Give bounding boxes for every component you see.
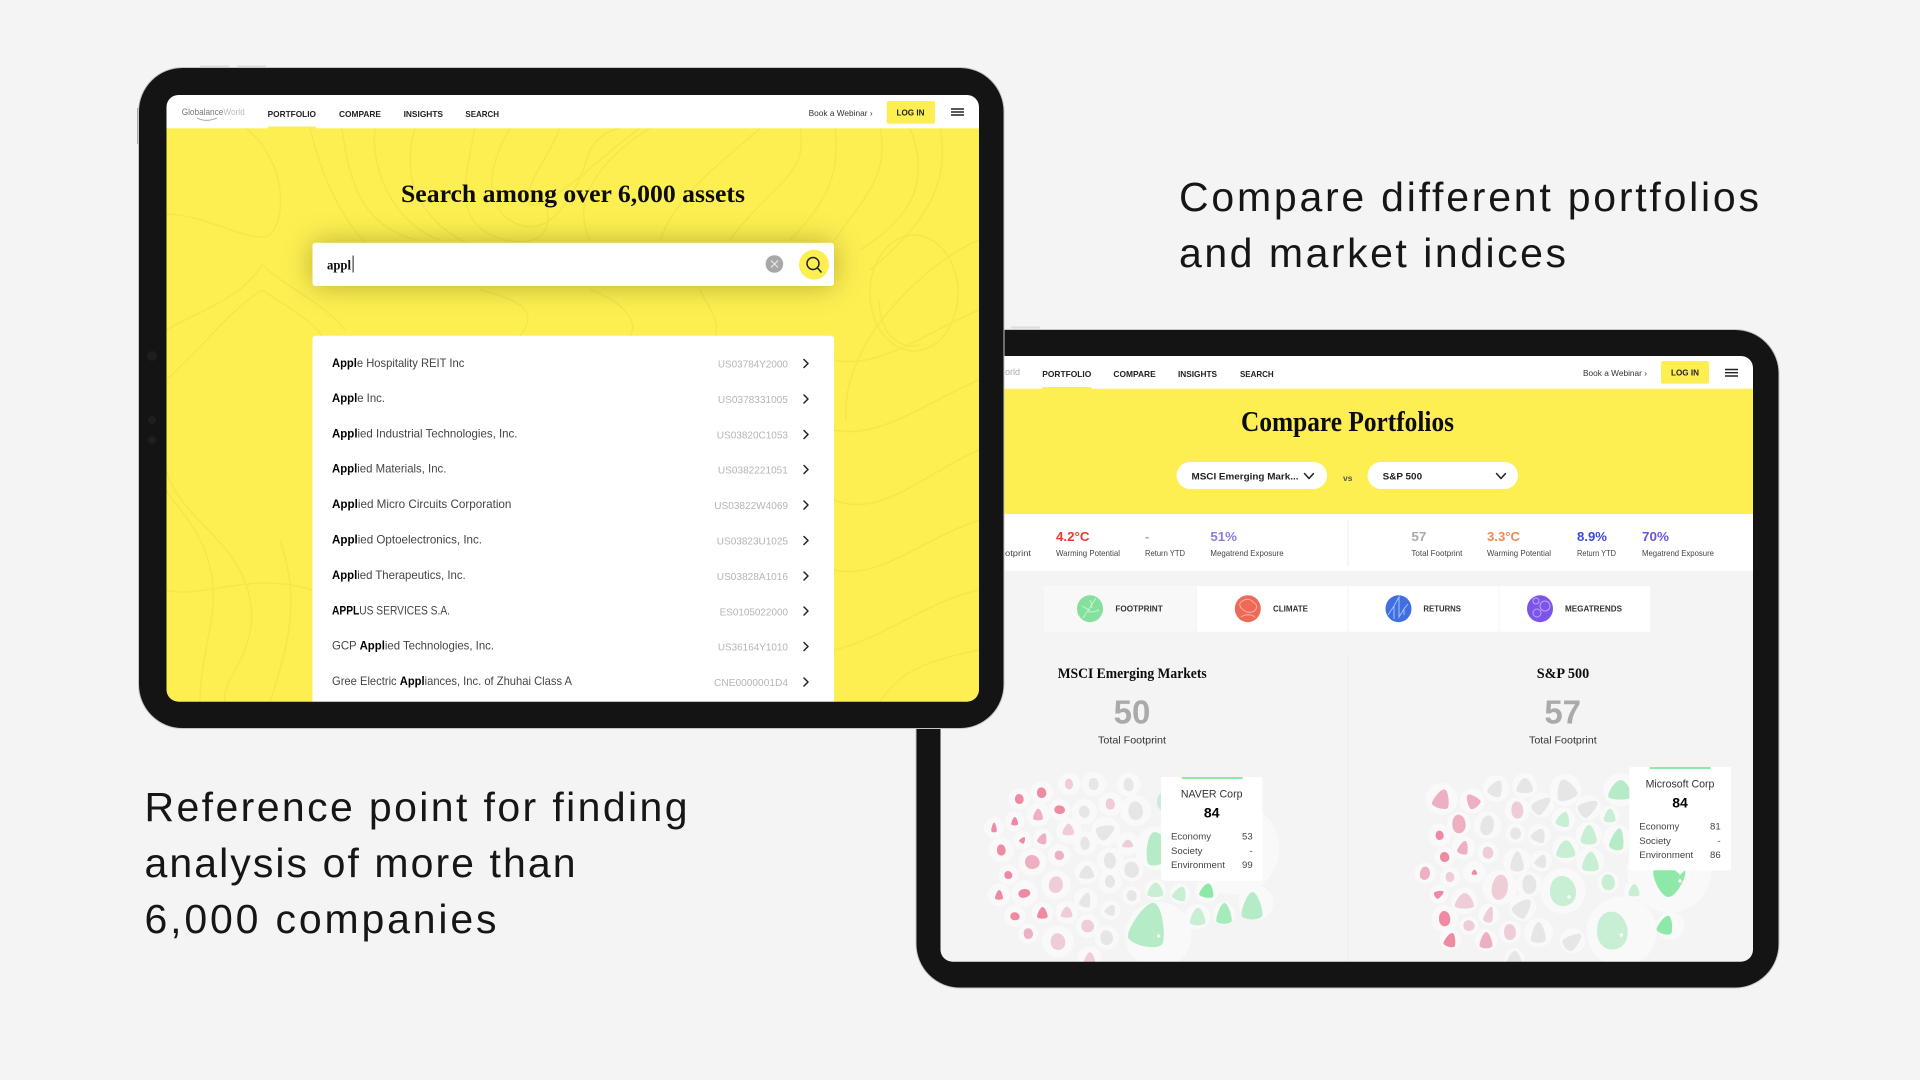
stat: return right: Return YTD [1577,548,1616,558]
tablet screen: search [166,95,979,716]
stat: megatrend left: Megatrend Exposure [1210,548,1284,558]
tooltip: Microsoft Corp: - [1717,836,1721,847]
result row 4: Applied Materials, Inc. [332,463,446,476]
navigation bar: PORTFOLIO [268,110,317,119]
result row 6 [332,533,808,548]
navigation bar: Book a Webinar › [1583,368,1647,378]
result row 2: Apple Inc. [332,392,385,405]
tooltip: NAVER Corp: NAVER Corp [1181,788,1243,800]
result row 8 [332,604,808,618]
panel: MSCI Emerging Markets: MSCI Emerging Markets [1058,666,1207,682]
result row 5: Applied Micro Circuits Corporation [332,498,511,511]
title: compare portfolios: Compare Portfolios [1241,407,1454,438]
tooltip: NAVER Corp: 84 [1204,804,1220,820]
blob chart: MSCI [991,778,1262,962]
tab: megatrends: MEGATRENDS [1565,604,1623,614]
stat: warming potential right: 3.3°C [1487,529,1521,544]
tooltip: NAVER Corp: 53 [1242,832,1253,842]
result row 3: US03820C1053 [717,430,788,442]
dropdown: S&P 500 [1368,462,1518,489]
tooltip: Microsoft Corp: Environment [1639,850,1693,861]
stat: return left [1146,536,1185,556]
panel: MSCI Emerging Markets: Total Footprint [1098,734,1166,746]
stat: total footprint right [1412,532,1462,558]
dropdown: S&P 500: S&P 500 [1383,470,1422,482]
result row 5 [332,498,808,512]
panel: MSCI Emerging Markets [991,668,1262,962]
tab: footprint: FOOTPRINT [1115,604,1163,614]
logo: Globalance World: GlobalanceWorld [182,107,245,117]
result row 2 [332,393,809,404]
navigation bar: SEARCH [465,110,499,119]
panel: S&P 500: Total Footprint [1529,734,1597,746]
navigation bar: INSIGHTS [1178,370,1218,379]
navigation bar: COMPARE [1113,370,1156,379]
tooltip: Microsoft Corp: Society [1639,836,1671,847]
yellow header band [940,389,1753,514]
stat: megatrend left: 51% [1210,529,1237,544]
icon: search button [799,250,829,280]
tablet: search assets [137,66,1004,728]
tablet: compare portfolios [916,326,1779,988]
stat: total footprint right: Total Footprint [1411,548,1463,558]
tooltip: NAVER Corp [1161,777,1262,885]
tab: climate [1235,595,1309,622]
results list [312,336,834,716]
tab: climate: CLIMATE [1273,604,1309,614]
tab: returns [1386,595,1462,622]
tooltip: Microsoft Corp: Economy [1639,822,1679,832]
search box [312,243,834,286]
infographic canvas [137,66,1780,988]
tooltip: NAVER Corp: Economy [1171,832,1211,842]
navigation bar: LOG IN [896,108,925,118]
tooltip: NAVER Corp: 99 [1242,860,1253,871]
tooltip: Microsoft Corp: 86 [1710,850,1721,861]
result row 3 [332,428,808,442]
panel: S&P 500: 57 [1544,694,1581,730]
stat: return left: - [1145,529,1149,544]
result row 8: ES0105022000 [720,607,788,618]
dropdown: MSCI: MSCI Emerging Mark... [1192,470,1298,482]
result row 9 [332,640,808,654]
dropdown: MSCI [1177,462,1327,489]
blob chart: S&P 500 [1420,778,1686,962]
tooltip: NAVER Corp: Environment [1171,860,1225,871]
stat: megatrend right [1642,532,1714,558]
result row 4 [332,463,808,477]
navigation bar [166,95,979,128]
stat: total footprint right: 57 [1411,529,1426,544]
heading: reference point [144,784,688,942]
stats strip: otprint [1005,548,1032,558]
result row 3: Applied Industrial Technologies, Inc. [332,428,518,440]
stat: megatrend right: 70% [1642,529,1669,544]
tooltip: Microsoft Corp: Microsoft Corp [1646,778,1715,790]
category tabs [1044,586,1650,632]
result row 1 [332,358,809,370]
stat: megatrend left [1210,532,1284,558]
tab: footprint [1077,595,1163,622]
stat: warming potential left: 4.2°C [1056,529,1090,544]
stat: warming potential right [1487,532,1550,558]
result row 9: GCP Applied Technologies, Inc. [332,640,494,653]
result row 7 [332,569,808,583]
navigation bar: orld [1005,367,1020,377]
result row 7: Applied Therapeutics, Inc. [332,569,466,582]
tooltip: NAVER Corp: - [1249,846,1253,857]
result row 1: Apple Hospitality REIT Inc [332,357,464,370]
stat: return right [1577,532,1616,556]
result row 5: US03822W4069 [714,501,788,512]
result row 10: Gree Electric Appliances, Inc. of Zhuhai Class A [332,675,572,688]
panel: MSCI Emerging Markets: 50 [1114,694,1150,730]
result row 9: US36164Y1010 [718,643,788,654]
tab: returns: RETURNS [1423,604,1462,614]
result row 10 [332,675,808,689]
stat: return right: 8.9% [1577,529,1607,544]
result row 1: US03784Y2000 [718,360,788,370]
stat: return left: Return YTD [1145,548,1185,558]
panel: S&P 500: S&P 500 [1537,666,1589,682]
title: search among assets: Search among over 6,000 assets [401,181,745,208]
panel: S&P 500 [1414,666,1731,968]
result row 7: US03828A1016 [717,572,788,583]
heading: reference point: analysis of more than [144,840,576,886]
stat: megatrend right: Megatrend Exposure [1642,548,1714,558]
stat: warming potential left [1056,532,1120,558]
navigation bar: COMPARE [339,110,382,119]
yellow background with contour lines [166,95,979,702]
heading: reference point: 6,000 companies [144,896,496,942]
tablet screen: compare [940,356,1753,970]
result row 8: APPLUS SERVICES S.A. [332,604,450,617]
icon: clear [766,255,783,273]
result row 6: Applied Optoelectronics, Inc. [332,533,482,546]
tooltip: Microsoft Corp: 81 [1710,822,1721,832]
result row 6: US03823U1025 [717,536,788,548]
stat: warming potential right: Warming Potential [1487,548,1551,558]
stats strip [940,514,1753,571]
tooltip: Microsoft Corp [1629,767,1731,875]
search box: appl [327,258,351,274]
navigation bar: INSIGHTS [404,110,444,119]
label: vs: vs [1343,473,1353,483]
tab: megatrends [1527,595,1623,622]
heading: compare portfolios: and market indices [1179,230,1566,276]
navigation bar: PORTFOLIO [1042,370,1092,379]
result row 2: US0378331005 [718,395,788,406]
navigation bar: SEARCH [1240,370,1274,379]
navigation bar [940,356,1753,389]
stat: warming potential left: Warming Potential [1056,548,1120,558]
result row 4: US0382221051 [718,466,788,477]
navigation bar: LOG IN [1671,368,1699,378]
heading: reference point: Reference point for finding [144,784,688,830]
heading: compare portfolios: Compare different portfolios [1179,174,1759,220]
tooltip: Microsoft Corp: 84 [1672,794,1688,810]
heading: compare portfolios [1179,174,1759,276]
result row 10: CNE0000001D4 [714,678,788,689]
navigation bar: Book a Webinar › [809,108,873,118]
tooltip: NAVER Corp: Society [1171,846,1203,857]
